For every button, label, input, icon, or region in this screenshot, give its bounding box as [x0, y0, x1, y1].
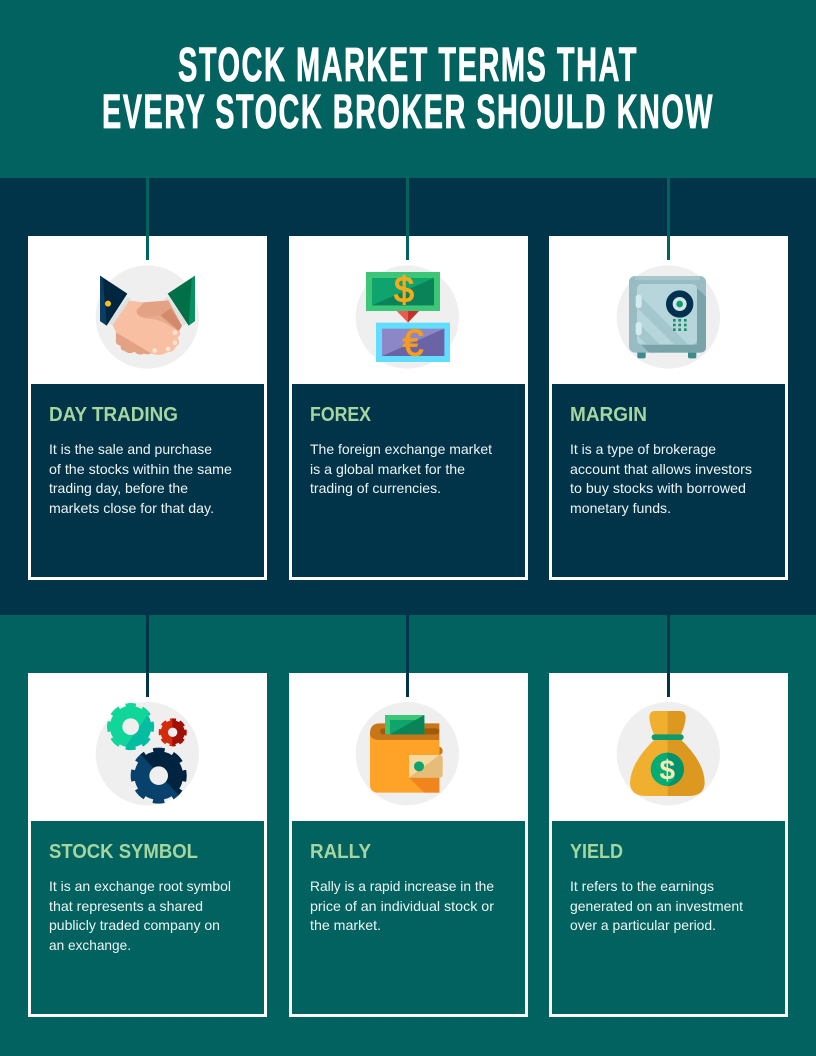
- text: yield: [570, 878, 743, 933]
- text: yield: It refers to the earnings: [570, 878, 714, 894]
- icon: gears: [96, 702, 199, 805]
- dark band: [0, 178, 816, 615]
- text: stock symbol: It is an exchange root symbol: [49, 878, 231, 894]
- connector: rally: [406, 615, 409, 697]
- text: stock symbol: publicly traded company on: [49, 917, 220, 933]
- text: forex: [310, 441, 492, 496]
- text: margin: It is a type of brokerage: [570, 441, 716, 457]
- icon: handshake: [96, 265, 199, 369]
- icon: currency exchange: €: [403, 321, 424, 363]
- text: stock symbol: [49, 878, 231, 953]
- text: stock symbol: that represents a shared: [49, 898, 203, 914]
- icon: money bag: $: [660, 754, 676, 785]
- connector: forex: [406, 178, 409, 260]
- heading: yield: YIELD: [570, 841, 623, 863]
- heading: margin: MARGIN: [570, 404, 647, 426]
- text: forex: The foreign exchange market: [310, 441, 492, 457]
- text: rally: price of an individual stock or: [310, 898, 494, 914]
- text: yield: over a particular period.: [570, 917, 716, 933]
- heading: rally: RALLY: [310, 841, 372, 863]
- icon: currency exchange: $: [394, 269, 414, 310]
- text: yield: generated on an investment: [570, 898, 743, 914]
- text: stock symbol: an exchange.: [49, 937, 131, 953]
- icon: safe: [617, 265, 720, 369]
- text: rally: [310, 878, 494, 933]
- text: day trading: markets close for that day.: [49, 500, 214, 516]
- icon: currency exchange: [356, 265, 459, 369]
- panel: forex: [289, 178, 528, 580]
- text: forex: is a global market for the: [310, 461, 465, 477]
- text: margin: [570, 441, 752, 516]
- text: day trading: [49, 441, 232, 516]
- text: day trading: of the stocks within the same: [49, 461, 232, 477]
- text: day trading: It is the sale and purchase: [49, 441, 212, 457]
- connector: yield: [667, 615, 670, 697]
- header band: [0, 0, 816, 178]
- icon: money bag: [617, 702, 720, 805]
- heading: stock symbol: STOCK SYMBOL: [49, 841, 198, 863]
- panel: stock symbol: [28, 615, 267, 1017]
- text: margin: account that allows investors: [570, 461, 752, 477]
- teal band: [0, 615, 816, 1056]
- heading: day trading: DAY TRADING: [49, 404, 178, 426]
- text: rally: the market.: [310, 917, 381, 933]
- text: rally: Rally is a rapid increase in the: [310, 878, 494, 894]
- heading: forex: FOREX: [310, 404, 372, 426]
- text: margin: to buy stocks with borrowed: [570, 480, 746, 496]
- connector: day trading: [146, 178, 149, 260]
- panel: margin: [549, 178, 788, 580]
- panel: rally: [289, 615, 528, 1017]
- icon: wallet: [356, 702, 459, 805]
- text: forex: trading of currencies.: [310, 480, 441, 496]
- panel: day trading: [28, 178, 267, 580]
- text: margin: monetary funds.: [570, 500, 671, 516]
- connector: stock symbol: [146, 615, 149, 697]
- text: day trading: trading day, before the: [49, 480, 188, 496]
- panel: yield: [549, 615, 788, 1017]
- title: [102, 39, 714, 139]
- connector: margin: [667, 178, 670, 260]
